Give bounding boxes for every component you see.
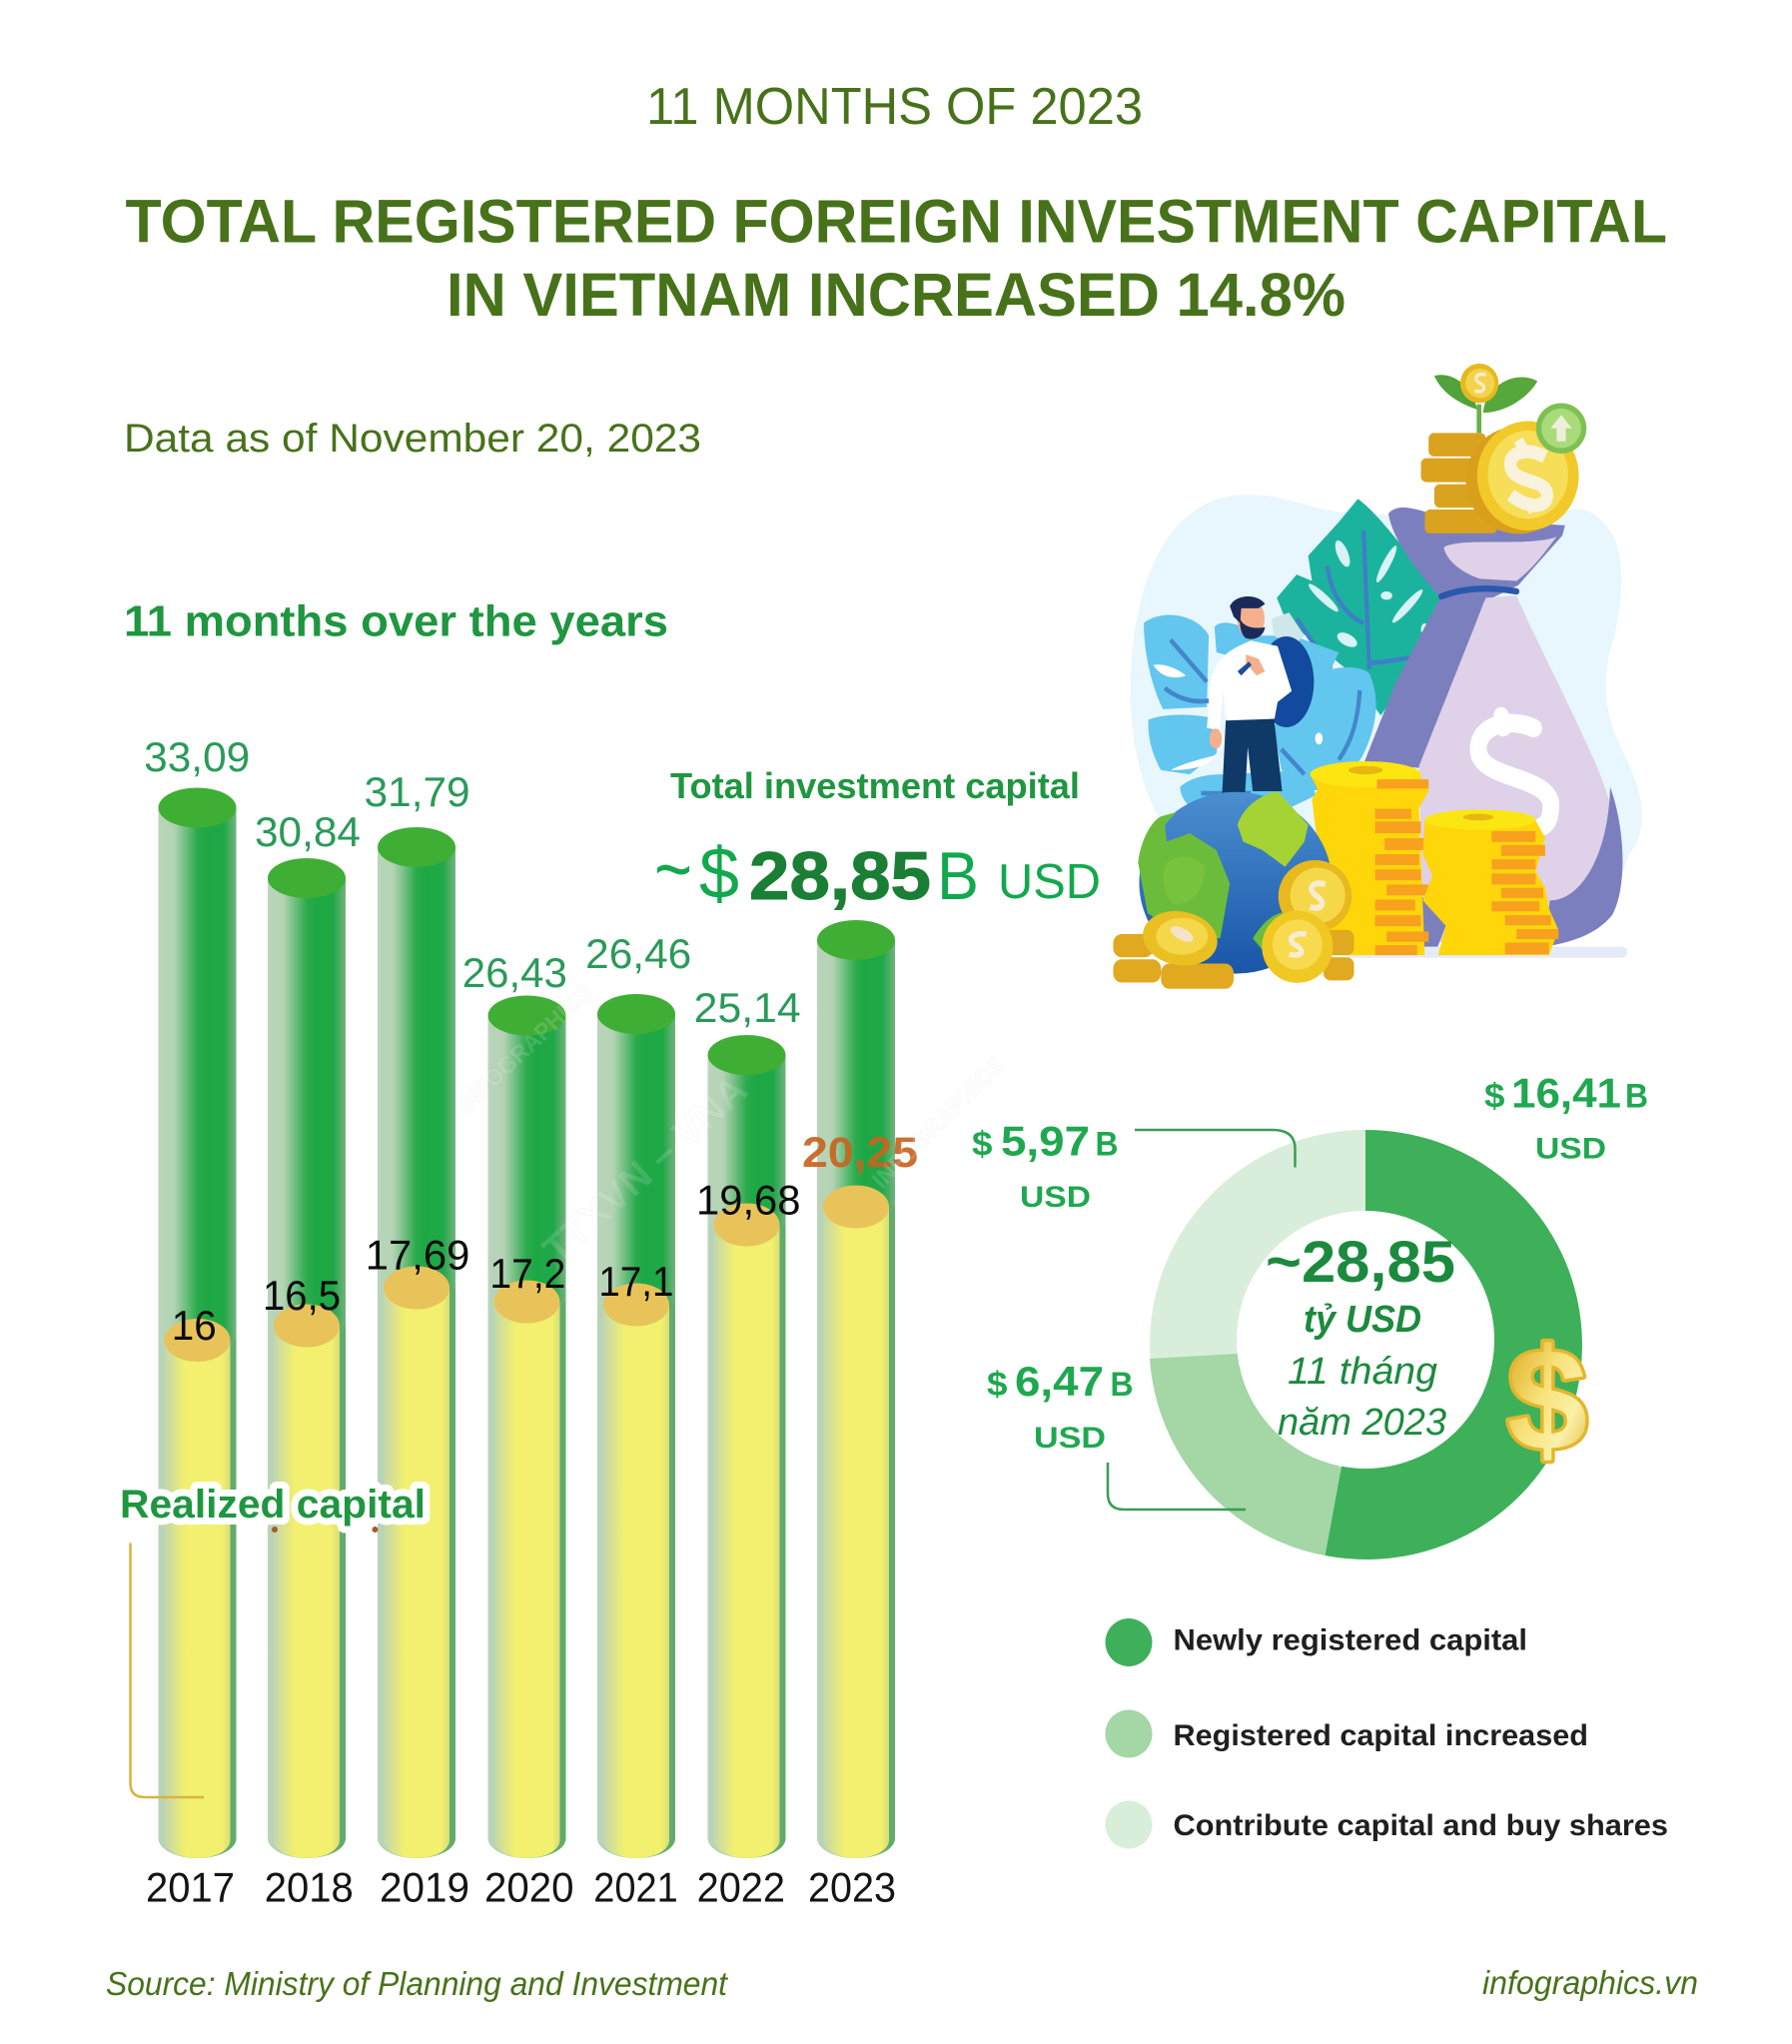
bar: 2022: 19,68 [696, 1177, 801, 1223]
illustration: investor, money bag, globe and coins [1113, 364, 1642, 989]
callout: realized capital [120, 1483, 426, 1797]
money bag [1363, 508, 1622, 951]
donut label: 5,97 with leader line: $ [972, 1125, 993, 1163]
bar: 2020: 17,2 [489, 1250, 565, 1297]
bar: 2019: 2019 [380, 1864, 469, 1910]
donut label: 6,47 with leader line: $ [987, 1366, 1008, 1404]
bar: 2022 [694, 984, 801, 1910]
source note: Source: Ministry of Planning and Investment [106, 1965, 729, 2002]
site credit: infographics.vn [1482, 1964, 1698, 2001]
watermarks: INFOGRAPHICS [452, 979, 598, 1118]
donut label: 6,47 with leader line [987, 1358, 1246, 1510]
donut chart [1150, 1130, 1587, 1559]
bar: 2021: 26,46 [585, 930, 691, 977]
bar: 2017: 2017 [146, 1864, 235, 1910]
data date note: Data as of November 20, 2023 [124, 417, 701, 461]
legend item: contribute capital [1105, 1800, 1668, 1848]
bar: 2018 [255, 808, 361, 1910]
donut label: 16,41: 16,41 [1511, 1069, 1621, 1117]
callout: total investment capital: B [937, 838, 979, 914]
donut label: 16,41: B [1625, 1077, 1648, 1115]
donut center label: 11 tháng [1288, 1351, 1437, 1393]
donut center label: ~28,85 [1266, 1230, 1455, 1295]
small coins [1113, 860, 1354, 989]
bar: 2023: 20,25 [802, 1129, 918, 1177]
legend item: contribute capital: Contribute capital and buy shares [1173, 1809, 1668, 1842]
bar: 2023: 2023 [808, 1864, 896, 1910]
callout: realized capital: Realized capital [120, 1483, 426, 1527]
watermarks [452, 979, 1010, 1273]
icon: gold dollar: $ [1507, 1319, 1587, 1481]
bar: 2023 [802, 920, 918, 1910]
section heading: 11 months over the years [124, 597, 668, 645]
legend [1105, 1618, 1668, 1848]
callout: total investment capital: USD [998, 855, 1101, 909]
donut center label: năm 2023 [1278, 1402, 1446, 1444]
watermarks: INFOGRAPHICS [867, 1051, 1010, 1194]
background blob [1131, 495, 1642, 896]
bar: 2021 [585, 930, 691, 1910]
callout: total investment capital: 28,85 [749, 838, 931, 914]
bar: 2021: 2021 [593, 1864, 678, 1910]
callout: total investment capital: $ [699, 834, 739, 914]
donut label: 5,97 with leader line [972, 1117, 1295, 1214]
bar: 2018: 2018 [265, 1864, 354, 1910]
donut center label [1266, 1230, 1455, 1444]
blue leaves [1144, 615, 1376, 810]
title [126, 188, 1667, 329]
bar: 2020: 26,43 [462, 949, 567, 996]
callout: total investment capital: ~ [654, 824, 692, 913]
coin stacks [1309, 761, 1627, 958]
callout: realized capital: Realized capital [120, 1483, 426, 1527]
donut center label: tỷ USD [1304, 1299, 1421, 1341]
globe [1138, 791, 1332, 974]
legend item: registered increased [1105, 1710, 1588, 1758]
donut label: 16,41: USD [1535, 1133, 1606, 1165]
donut label: 6,47 with leader line: 6,47 [1015, 1358, 1104, 1405]
callout: total investment capital [654, 765, 1101, 914]
donut label: 5,97 with leader line: USD [1020, 1181, 1091, 1214]
legend item: newly registered [1105, 1618, 1527, 1666]
bar: 2020: 2020 [484, 1864, 573, 1910]
bar: 2019: 17,69 [366, 1231, 469, 1279]
investor figure [1207, 596, 1314, 793]
donut label: 6,47 with leader line: B [1111, 1366, 1133, 1404]
bar: 2022: 2022 [697, 1864, 785, 1910]
top coin stack with plant [1421, 364, 1586, 533]
legend item: newly registered: Newly registered capital [1173, 1624, 1527, 1656]
bar: 2021: 17,1 [598, 1258, 673, 1305]
overline: 11 months of 2023: 11 MONTHS OF 2023 [646, 78, 1143, 136]
bar: 2017: 16 [172, 1302, 217, 1349]
bar: 2018: 30,84 [255, 808, 361, 855]
watermarks: TTXVN – VNA [535, 1067, 756, 1273]
bar: 2018: 16,5 [263, 1272, 341, 1319]
bar: 2020 [462, 949, 573, 1910]
donut label: 16,41: $ [1484, 1077, 1505, 1115]
donut label: 6,47 with leader line: USD [1034, 1422, 1106, 1455]
bar: 2017 [144, 733, 250, 1910]
title: IN VIETNAM INCREASED 14.8% [447, 261, 1345, 329]
donut label: 5,97 with leader line: B [1095, 1125, 1119, 1163]
bar: 2019 [365, 768, 470, 1910]
donut label: 5,97 with leader line: 5,97 [1001, 1117, 1090, 1165]
bar: 2017: 33,09 [144, 733, 250, 780]
callout: total investment capital: Total investment capital [670, 765, 1080, 806]
teal leaf [1277, 499, 1442, 715]
bar chart: investment capital by year [144, 733, 918, 1910]
bar: 2022: 25,14 [694, 984, 801, 1031]
bar: 2019: 31,79 [365, 768, 470, 815]
legend item: registered increased: Registered capital increased [1173, 1719, 1588, 1752]
title: TOTAL REGISTERED FOREIGN INVESTMENT CAPITAL [126, 188, 1667, 256]
donut label: 16,41 [1484, 1069, 1648, 1165]
